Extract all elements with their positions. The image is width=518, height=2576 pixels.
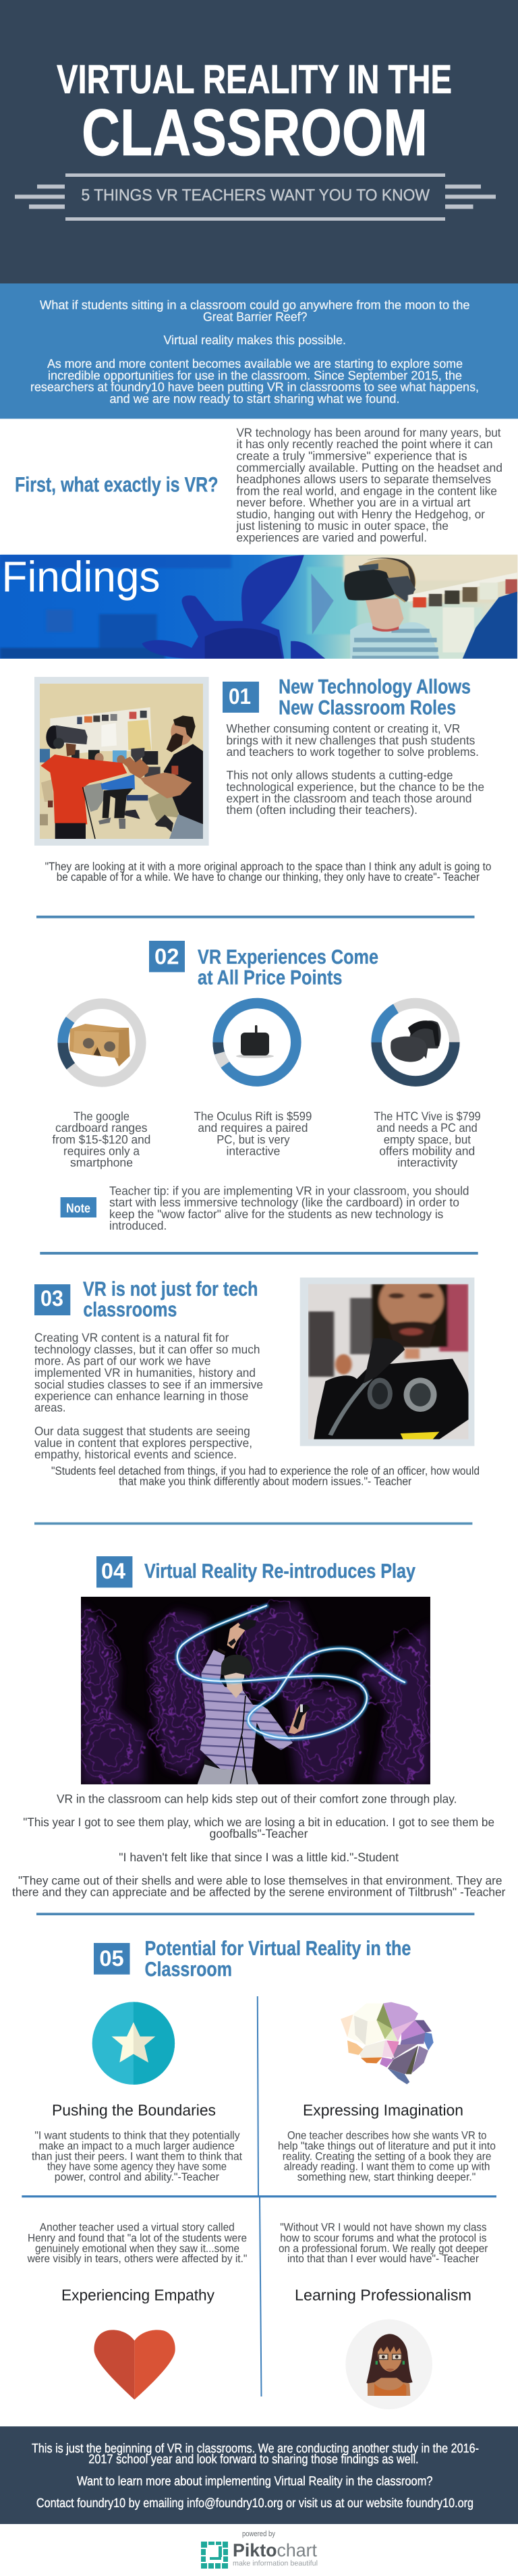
icon: cardboard viewer [69, 1024, 130, 1066]
quote: imagination: something new, start thinking deeper." [297, 2171, 476, 2183]
panel: blue introduction: What if students sitting in a classroom could go anywhere from the moon to the [40, 298, 469, 312]
panel: closing footer: Want to learn more about implementing Virtual Reality in the classroom? [77, 2475, 433, 2489]
number badge 02: 02 [154, 943, 179, 968]
quote: professionalism: into that than I ever would have"- Teacher [287, 2253, 479, 2265]
panel: blue introduction: Great Barrier Reef? [203, 309, 308, 324]
text block 01: This not only allows students a cutting-edge [227, 768, 453, 782]
icon: low-poly brain [341, 2002, 434, 2084]
text block 03: areas. [34, 1401, 66, 1415]
heading 01 [279, 676, 471, 719]
panel: blue introduction: researchers at foundry10 have been putting VR in classrooms to see what happens, [30, 380, 479, 394]
text block: VR definition: commercially available. Putting on the headset and [236, 461, 502, 474]
text block 03: implemented VR in humanities, history and [34, 1366, 256, 1379]
piktochart credit: powered by [242, 2530, 275, 2538]
text block 01: technological experience, but the chance to be the [227, 780, 484, 794]
text block: VR definition: studio, hanging out with Henry the Hedgehog, or [236, 508, 485, 521]
caption: vive: empty space, but [384, 1132, 471, 1146]
flag [311, 574, 334, 634]
quote 01 [45, 860, 491, 883]
caption: cardboard: requires only a [63, 1145, 140, 1158]
piktochart credit: make information beautiful [233, 2560, 318, 2568]
text block 01: expert in the classroom and teach those around [227, 792, 472, 805]
donut chart: google cardboard [63, 1004, 141, 1082]
number badge 03 [34, 1284, 70, 1315]
text block: VR definition: headphones allows users to separate themselves [236, 472, 491, 486]
heading 02: VR Experiences Come [198, 946, 378, 968]
header panel [0, 0, 518, 283]
heading 01: New Technology Allows [279, 676, 471, 698]
photo: tilt brush light painting [76, 1597, 430, 1784]
caption: vive [374, 1109, 481, 1170]
heading 04: Virtual Reality Re-introduces Play [144, 1560, 415, 1583]
text block: VR definition: it has only recently reached the point where it can [236, 437, 492, 451]
photo frame: headset lesson [34, 677, 209, 846]
subtitle banner with stripes: 5 THINGS VR TEACHERS WANT YOU TO KNOW [81, 186, 430, 204]
panel: blue introduction: Virtual reality makes this possible. [163, 333, 346, 347]
caption: oculus: The Oculus Rift is $599 [194, 1109, 312, 1123]
quote: empathy: genuinely emotional when they saw it...some [35, 2243, 239, 2255]
student in red hoodie [40, 755, 127, 827]
heading 05 [144, 1938, 411, 1981]
caption: oculus: and requires a paired [198, 1121, 308, 1134]
quote: professionalism: on a professional forum. We really got deeper [279, 2243, 488, 2255]
icon: piktochart logo [201, 2542, 228, 2569]
heading 03: classrooms [83, 1299, 177, 1321]
donut chart: oculus rift [218, 1003, 296, 1081]
panel: closing footer: 2017 school year and look forward to sharing those findings as well. [88, 2452, 419, 2467]
number badge 03: 03 [40, 1286, 63, 1311]
quote: professionalism [279, 2222, 488, 2265]
number badge 05 [94, 1943, 130, 1975]
quote: professionalism: "Without VR I would not have shown my class [280, 2222, 487, 2234]
teacher tip: start with less immersive technology (like the cardboard) in order to [109, 1196, 459, 1209]
text block 04: "This year I got to see them play, which we are losing a bit in education. I got to see them be [23, 1815, 494, 1829]
quote: pushing: "I want students to think that they potentially [34, 2130, 240, 2142]
number badge 01 [223, 682, 259, 713]
text block: VR definition: create a truly "immersive" experience that is [236, 449, 467, 463]
panel: blue introduction: and we are now ready to start sharing what we found. [109, 391, 399, 406]
photo: headset closeup [308, 1273, 469, 1440]
text block: VR definition: experiences are varied and powerful. [236, 531, 427, 545]
text block 04: VR in the classroom can help kids step out of their comfort zone through play. [57, 1792, 457, 1805]
quote: empathy [27, 2222, 248, 2265]
turtle [142, 555, 325, 659]
text block 03: technology classes, but it can offer so much [34, 1342, 260, 1356]
text block 01: and teachers to work together to solve problems. [227, 745, 479, 759]
photo frame: man holding headset [300, 1273, 474, 1446]
quote: professionalism: how to scour forums and what the protocol is [280, 2232, 487, 2244]
panel: closing footer [0, 2426, 518, 2524]
text block 03: value in content that explores perspective, [34, 1436, 252, 1450]
caption: vive: interactivity [397, 1156, 457, 1170]
banner heading: Findings [1, 553, 161, 601]
caption title: learning professionalism: Learning Professionalism [295, 2286, 471, 2303]
text block 01: Whether consuming content or creating it, VR [227, 722, 460, 736]
panel: blue introduction [0, 283, 518, 418]
number badge 04: 04 [101, 1558, 126, 1583]
title: CLASSROOM [82, 95, 428, 169]
student [344, 557, 439, 659]
quote: empathy: Another teacher used a virtual story called [40, 2222, 235, 2234]
number badge 02 [149, 941, 185, 972]
quote: pushing: than just their peers. I want them to think that [32, 2150, 242, 2162]
caption: cardboard: from $15-$120 and [52, 1132, 150, 1146]
quote 03 [51, 1464, 480, 1488]
classroom wall posters [408, 572, 517, 653]
text block: VR definition: VR technology has been around for many years, but [236, 426, 500, 439]
quote: pushing: make an impact to a much larger audience [39, 2140, 235, 2152]
panel: section 01 [34, 676, 491, 883]
teacher tip [109, 1184, 469, 1232]
icon: oculus sensor [236, 1025, 274, 1058]
icon: star badge [92, 2002, 175, 2085]
text block 04: "I haven't felt like that since I was a little kid."-Student [119, 1851, 399, 1864]
teacher tip: introduced. [109, 1219, 167, 1232]
caption: cardboard: The google [74, 1109, 130, 1123]
quote: imagination: already reading. I want them to come up with [284, 2161, 490, 2173]
person [198, 1619, 310, 1784]
heading 03: VR is not just for tech [83, 1278, 258, 1300]
findings banner [0, 553, 518, 659]
text block 03: empathy, historical events and science. [34, 1448, 237, 1461]
caption: oculus: interactive [227, 1145, 280, 1158]
quote: imagination: reality. Creating the setting of a book they are [283, 2150, 491, 2162]
text block 04: goofballs"-Teacher [209, 1827, 308, 1840]
text block 01: them (often including their teachers). [227, 803, 418, 817]
heading 02 [198, 946, 378, 989]
caption: vive: offers mobility and [379, 1145, 475, 1158]
text block 03: Creating VR content is a natural fit for [34, 1331, 229, 1344]
text block 01 [227, 722, 484, 817]
text block: VR definition [236, 426, 502, 545]
caption: vive: The HTC Vive is $799 [374, 1109, 481, 1123]
panel: section 03 [34, 1273, 480, 1488]
quote: imagination [278, 2130, 496, 2183]
heading 02: at All Price Points [198, 966, 343, 989]
heading 05: Classroom [144, 1958, 232, 1981]
text block 03: social studies classes to see if an immersive [34, 1377, 263, 1391]
icon: teacher portrait [345, 2320, 432, 2409]
number badge 05: 05 [99, 1946, 124, 1971]
text block: VR definition: just listening to music in outer space, the [236, 519, 449, 532]
number badge 04 [96, 1556, 132, 1587]
text block 03: Our data suggest that students are seeing [34, 1425, 250, 1438]
text block 04: "They came out of their shells and were able to lose themselves in that environment. They are [18, 1873, 502, 1887]
note badge: Note [66, 1201, 90, 1216]
quadrant dividers [22, 1996, 496, 2396]
heading 01: New Classroom Roles [279, 696, 456, 719]
caption: cardboard: smartphone [70, 1156, 133, 1170]
text block 04: there and they can appreciate and be affected by the serene environment of Tiltbrush" -Teacher [12, 1886, 505, 1899]
quote: empathy: Henry and found that "a lot of the students were [28, 2232, 247, 2244]
text block 03: experience can enhance learning in those [34, 1390, 248, 1403]
photo: student and teacher with headset [40, 684, 203, 839]
panel: blue introduction: As more and more content becomes available we are starting to explore some [47, 356, 463, 371]
heading: what is VR: First, what exactly is VR? [15, 472, 219, 497]
banner photo: turtle and student in headset [0, 555, 518, 659]
caption: oculus [194, 1109, 312, 1158]
panel: section 04 [12, 1556, 505, 1899]
heading 05: Potential for Virtual Reality in the [144, 1938, 411, 1960]
donut chart: htc vive [376, 1003, 455, 1081]
quote 03: "Students feel detached from things, if you had to experience the role of an officer, how would [51, 1464, 480, 1477]
heading 03 [83, 1278, 258, 1321]
seated students [94, 753, 104, 761]
quote: pushing [32, 2130, 242, 2183]
quote: pushing: power, control and ability."-Teacher [55, 2171, 219, 2183]
text block 04 [12, 1792, 505, 1899]
panel: section 05 [22, 1938, 496, 2409]
text block: VR definition: from the real world, and engage in the content like [236, 484, 497, 497]
text block 01: brings with it new challenges that push students [227, 734, 475, 747]
quote: imagination: One teacher describes how she wants VR to [287, 2130, 487, 2142]
icon: heart [94, 2330, 175, 2400]
light ribbon [177, 1606, 405, 1738]
piktochart wordmark: Piktochart [233, 2540, 317, 2560]
text block 03 [34, 1331, 263, 1461]
quote: imagination: help "take things out of literature and put it into [278, 2140, 496, 2152]
caption title: expressing imagination: Expressing Imagination [303, 2102, 463, 2119]
text block: VR definition: never before. Whether you are in a virtual art [236, 496, 471, 510]
caption: cardboard: cardboard ranges [55, 1121, 147, 1134]
quote: pushing: they have some agency they have some [47, 2161, 227, 2173]
teacher [164, 744, 203, 824]
note badge [61, 1197, 96, 1217]
quote: empathy: were visibly in tears, others were affected by it." [27, 2253, 248, 2265]
quote 01: be capable of for a while. We have to change our thinking, they only have to create"- Teacher [57, 871, 480, 883]
caption: cardboard [52, 1109, 150, 1170]
teacher tip: keep the "wow factor" alive for the students as new technology is [109, 1207, 443, 1221]
panel: blue introduction: incredible opportunities for use in the classroom. Since September 2015, the [48, 368, 462, 382]
quote 03: that make you think differently about modern issues."- Teacher [119, 1475, 412, 1488]
text block 03: more. As part of our work we have [34, 1354, 210, 1368]
piktochart credit [201, 2530, 318, 2569]
teacher tip: Teacher tip: if you are implementing VR in your classroom, you should [109, 1184, 469, 1197]
caption title: experiencing empathy: Experiencing Empathy [61, 2286, 214, 2303]
caption title: pushing the boundaries: Pushing the Boundaries [52, 2102, 216, 2119]
caption: vive: and needs a PC and [376, 1121, 478, 1134]
number badge 01: 01 [229, 684, 251, 709]
icon: vive headset [391, 1020, 441, 1062]
title [57, 57, 452, 169]
caption: oculus: PC, but is very [217, 1132, 290, 1146]
subtitle banner with stripes [15, 173, 496, 221]
panel: section 02 [52, 941, 481, 1232]
